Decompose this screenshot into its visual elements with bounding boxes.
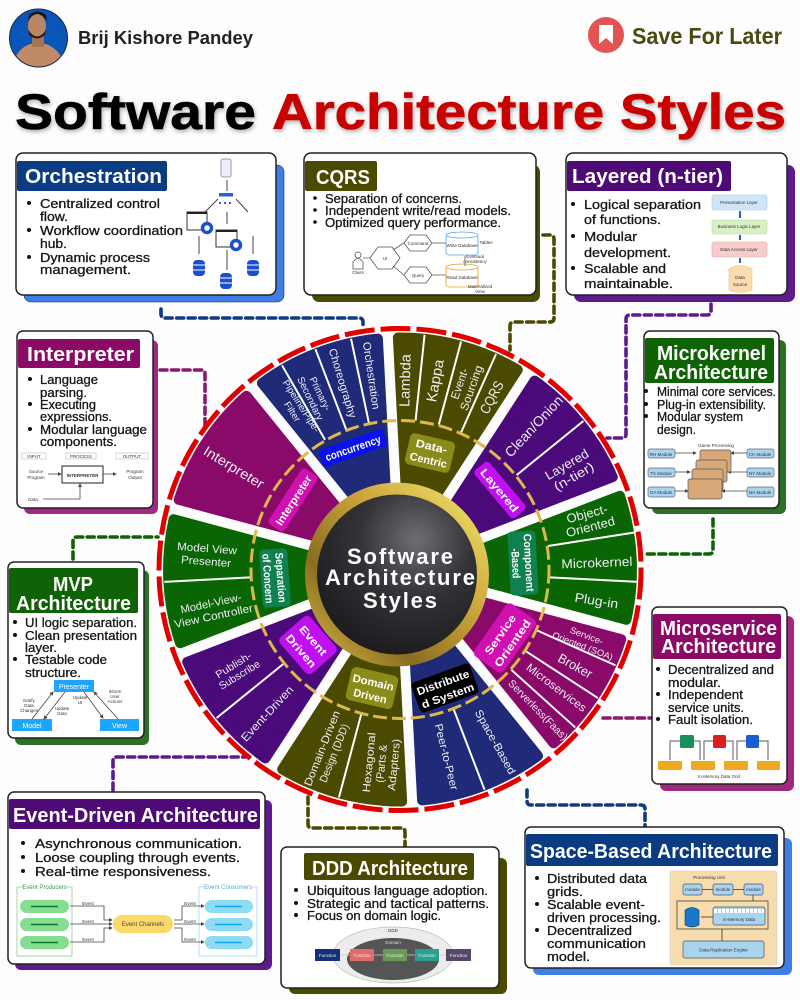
- category pill: domain driven: Driven: [352, 687, 388, 706]
- bullet list: [571, 198, 701, 291]
- heading: Layered (n-tier): [572, 166, 723, 188]
- heading: [17, 161, 167, 191]
- wheel chart: [159, 325, 641, 814]
- bullet list: Focus on domain logic.: [307, 909, 441, 923]
- bullet list: UI logic separation.: [25, 616, 137, 630]
- heading: Event-Driven Architecture: [13, 805, 258, 827]
- diagram: mvp: User: [110, 694, 120, 699]
- bullet list: Scalable event-: [547, 898, 645, 912]
- label: interpreter style: Interpreter: [201, 443, 267, 492]
- panel: interpreter: [17, 331, 158, 514]
- diagram: mvp: Data: [24, 703, 34, 708]
- bullet list: service units.: [668, 701, 744, 715]
- bullet list: parsing.: [40, 386, 87, 400]
- labels: distributed styles: Peer-to-Peer: [432, 723, 460, 792]
- segment: distributed system: [372, 625, 543, 812]
- bullet list: Modular system: [657, 410, 743, 424]
- diagram: processing unit: In-Memory Data: [723, 917, 756, 922]
- connector: event-driven: [113, 757, 250, 790]
- labels: domain styles: (Parts &: [374, 744, 390, 783]
- bullet list: Asynchronous communication.: [35, 837, 242, 851]
- diagram: processing unit: [670, 871, 777, 965]
- diagram: cqrs: View: [475, 289, 486, 294]
- diagram: interpreter flow: Output: [128, 475, 143, 480]
- labels: data-centric styles: Lambda: [397, 353, 415, 407]
- diagram: mvp: [12, 680, 139, 731]
- diagram: cqrs: Materialized: [468, 284, 493, 289]
- labels: separation styles: Presenter: [181, 554, 232, 570]
- hub title: Software: [347, 544, 453, 569]
- heading: Microservice: [660, 618, 777, 640]
- bullet list: maintainable.: [584, 277, 673, 291]
- panel: space-based: [525, 827, 792, 975]
- category pill: domain driven: [345, 666, 399, 710]
- avatar: [8, 8, 70, 70]
- labels: data-centric styles: [397, 353, 507, 417]
- segment: layered: [426, 373, 622, 565]
- save for later: Save For Later: [632, 23, 782, 49]
- diagram: cqrs: Command: [408, 241, 429, 246]
- diagram: processing unit: Data-Replication Engine: [699, 948, 748, 952]
- bullet list: Independent: [668, 688, 744, 702]
- labels: component styles: Oriented: [565, 514, 616, 540]
- labels: service styles: [505, 620, 618, 743]
- heading: Interpreter: [27, 344, 134, 366]
- save for later: [588, 17, 782, 53]
- diagram: event flow: Event: [82, 919, 94, 924]
- labels: service styles: Serverless(Faas): [505, 678, 570, 743]
- diagram: cqrs: UI: [383, 256, 387, 261]
- outer red dashed ring: [159, 328, 641, 810]
- bullet list: Real-time responsiveness.: [35, 865, 211, 879]
- category pill: separation of concern: Separation: [272, 552, 288, 603]
- heading: [526, 834, 778, 866]
- bullet list: expressions.: [40, 410, 112, 424]
- bullet list: Logical separation: [584, 198, 701, 212]
- bullet list: grids.: [547, 885, 583, 899]
- hub title: Styles: [363, 588, 437, 613]
- category pill: service oriented: Oriented: [493, 618, 534, 670]
- diagram: microservices: In-Memory Data Grid: [698, 774, 740, 779]
- heading: MVP: [53, 574, 93, 596]
- connector: layered: [607, 304, 711, 438]
- diagram: mvp: Data: [57, 711, 67, 716]
- bullet list: model.: [547, 950, 590, 964]
- diagram: mvp: Presenter: [59, 684, 90, 691]
- panel: mvp: [8, 562, 149, 745]
- labels: service styles: Service-: [569, 625, 605, 647]
- heading: DDD Architecture: [312, 858, 468, 880]
- bullet list: modular.: [668, 676, 721, 690]
- labels: concurrency styles: Filter: [281, 400, 302, 424]
- diagram: cqrs: Query: [412, 273, 425, 278]
- diagram: processing unit: module: [716, 887, 731, 892]
- labels: service styles: Broker: [555, 650, 596, 682]
- labels: domain styles: Domain-Driven: [302, 709, 343, 788]
- labels: separation styles: [171, 541, 254, 631]
- category pill: service oriented: [472, 601, 538, 675]
- category pill: layered: [473, 460, 527, 520]
- bullet list: design.: [657, 423, 696, 437]
- bullet list: [535, 872, 661, 964]
- bullet list: [21, 837, 242, 879]
- bullet list: Centralized control: [40, 197, 160, 211]
- labels: event styles: Subscribe: [217, 658, 263, 692]
- diagram: interpreter flow: Program: [27, 475, 45, 480]
- bullet list: Plug-in extensibility.: [657, 398, 766, 412]
- diagram: event flow: Event: [82, 937, 94, 942]
- labels: component styles: Microkernel: [561, 554, 633, 571]
- segment: service oriented: [436, 563, 632, 750]
- bullet list: hub.: [40, 237, 67, 251]
- hub title: [325, 544, 475, 613]
- category pill: component-based: -Based: [508, 548, 522, 579]
- diagram: event flow: [17, 884, 257, 956]
- bullet list: communication: [547, 937, 646, 951]
- heading: Orchestration: [25, 166, 162, 188]
- bullet list: driven processing.: [547, 911, 661, 925]
- labels: data-centric styles: Kappa: [424, 357, 448, 403]
- heading: [9, 568, 138, 615]
- category pill: layered: Layered: [477, 467, 520, 515]
- labels: concurrency styles: Pipeline/Pipe-: [280, 378, 321, 435]
- bullet list: Dynamic process: [40, 251, 150, 265]
- diagram: domain: Domain: [385, 940, 401, 945]
- diagram: mvp: Inform: [109, 689, 122, 694]
- diagram: cqrs: Tables: [479, 240, 493, 245]
- bullet list: components.: [40, 435, 117, 449]
- diagram: interpreter flow: PROCESS: [70, 454, 92, 459]
- diagram: cqrs: Client: [352, 270, 364, 275]
- diagram: mvp: Actions: [108, 699, 123, 704]
- title: [15, 84, 786, 140]
- heading: Microkernel: [657, 343, 766, 365]
- diagram: interpreter flow: INPUT: [27, 454, 41, 459]
- labels: data-centric styles: Event-: [449, 367, 471, 401]
- diagram: event flow: Event: [184, 901, 196, 906]
- diagram: domain: Function: [353, 953, 371, 958]
- bullet list: Separation of concerns.: [325, 192, 462, 206]
- panel: event-driven: [8, 792, 272, 970]
- bullet list: Independent write/read models.: [325, 204, 511, 218]
- diagram: microkernel modules: Game Processing: [698, 443, 734, 448]
- segment: component-based: [480, 495, 639, 627]
- bullet list: Scalable and: [584, 262, 666, 276]
- bullet list: Minimal core services.: [657, 385, 776, 399]
- labels: layered styles: (n-tier): [551, 459, 597, 494]
- labels: separation styles: Model-View-: [179, 592, 243, 616]
- diagram: event flow: Event: [184, 919, 196, 924]
- labels: component styles: Plug-in: [574, 590, 619, 611]
- diagram: event flow: Event: [82, 901, 94, 906]
- bullet list: Optimized query performance.: [325, 216, 501, 230]
- bullet list: Testable code: [25, 653, 107, 667]
- bullet list: Loose coupling through events.: [35, 851, 240, 865]
- bullet list: structure.: [25, 666, 81, 680]
- diagram: interpreter flow: Source: [29, 469, 44, 474]
- labels: domain styles: [302, 709, 403, 795]
- connector: space-based: [527, 790, 645, 827]
- labels: event styles: Event-Driven: [239, 684, 296, 744]
- connector: mvp: [73, 537, 158, 559]
- diagram: domain: [315, 927, 471, 983]
- diagram: domain: Function: [418, 953, 436, 958]
- connector: microservice: [603, 716, 652, 720]
- heading: CQRS: [316, 167, 370, 189]
- labels: separation styles: Model View: [177, 541, 237, 557]
- diagram: layers: [712, 195, 767, 292]
- category pill: service oriented: Service: [483, 613, 519, 657]
- diagram: microkernel modules: [648, 443, 774, 499]
- bullet list: [27, 197, 183, 277]
- bullet list: management.: [40, 263, 131, 277]
- diagram: layers: Data: [735, 275, 745, 280]
- diagram: cqrs: [352, 232, 493, 294]
- labels: data-centric styles: Sourcing: [459, 364, 486, 412]
- diagram: processing unit: module: [685, 887, 700, 892]
- bullet list: [656, 663, 774, 727]
- diagram: event flow: Event Consumers: [204, 885, 252, 891]
- bullet list: Workflow coordination: [40, 224, 183, 238]
- bullet list: [313, 192, 511, 230]
- labels: service styles: Oriented (SOA): [551, 630, 614, 662]
- labels: concurrency styles: [271, 341, 382, 440]
- diagram: mvp: Update: [73, 695, 88, 700]
- heading: [18, 339, 140, 368]
- diagram: interpreter flow: OUTPUT: [123, 454, 142, 459]
- labels: component styles: [561, 501, 633, 611]
- diagram: mvp: View: [112, 723, 128, 730]
- diagram: domain: Function: [386, 953, 404, 958]
- segment: data-centric: [362, 325, 521, 505]
- segment: event driven: [178, 574, 374, 766]
- category pill: event driven: Driven: [283, 633, 318, 671]
- labels: component styles: Object-: [565, 502, 609, 526]
- labels: separation styles: View Controller: [173, 602, 254, 631]
- diagram: microkernel modules: CK Module: [749, 452, 772, 457]
- labels: event styles: Publish-: [213, 650, 254, 681]
- category pill: distributed system: Distribute: [415, 668, 471, 698]
- bullet list: [644, 385, 776, 437]
- category pill: distributed system: d System: [420, 681, 476, 712]
- labels: layered styles: Clean/Onion: [501, 392, 566, 460]
- diagram: processing unit: Processing Unit: [693, 875, 726, 880]
- diagram: layers: Business Logic Layer: [718, 224, 761, 229]
- bullet list: Modular: [584, 230, 637, 244]
- diagram: mvp: UI: [78, 700, 82, 705]
- diagram: domain: Function: [450, 953, 468, 958]
- labels: domain styles: Hexagonal: [361, 732, 378, 793]
- heading: Space-Based Architecture: [530, 841, 772, 863]
- diagram: microkernel modules: RH Module: [650, 452, 673, 457]
- labels: service styles: Microservices: [524, 662, 588, 715]
- diagram: mvp: Changes: [20, 708, 39, 713]
- diagram: microkernel modules: NY Module: [749, 471, 772, 476]
- category pill: separation of concern: [259, 548, 291, 608]
- panel: microkernel: [644, 331, 786, 514]
- diagram: domain: Function: [319, 953, 337, 958]
- diagram: cqrs: Eventual: [466, 254, 484, 259]
- segment: domain driven: [279, 634, 438, 814]
- connector: orchestration: [161, 309, 363, 328]
- bullet list: Decentralized and: [668, 663, 774, 677]
- author name: Brij Kishore Pandey: [78, 28, 253, 48]
- diagram: interpreter flow: Program: [126, 469, 144, 474]
- category pill: concurrency: concurrency: [324, 434, 383, 464]
- bullet list: [28, 373, 147, 449]
- labels: domain styles: Design (DDD): [318, 722, 352, 784]
- diagram: mvp: Notify: [23, 698, 35, 703]
- category pill: component-based: [507, 530, 539, 596]
- diagram: cqrs: consistency: [463, 259, 488, 264]
- diagram: mvp: Update: [55, 706, 70, 711]
- heading: [653, 614, 781, 659]
- labels: concurrency styles: Orchestration: [360, 341, 382, 410]
- diagram: microkernel modules: GA Module: [650, 490, 673, 495]
- diagram: domain: DDD: [388, 928, 399, 933]
- diagram: microkernel modules: TX Module: [650, 471, 672, 476]
- diagram: interpreter flow: [22, 453, 148, 502]
- bullet list: Executing: [40, 398, 96, 412]
- labels: concurrency styles: Secondary: [294, 375, 325, 422]
- panel: microservice: [652, 607, 794, 791]
- diagram: microkernel modules: MA Module: [749, 490, 772, 495]
- category pill: distributed system: [410, 662, 480, 714]
- title: Architecture Styles: [272, 84, 786, 140]
- category pill: interpreter: Interpreter: [274, 473, 315, 528]
- segment: concurrency: [257, 327, 428, 514]
- labels: concurrency styles: Choreography: [326, 347, 358, 420]
- icon: bookmark: [588, 17, 624, 53]
- diagram: layers: Data Access Layer: [720, 247, 758, 252]
- author header: [8, 8, 253, 70]
- diagram: cqrs: Write Database: [447, 243, 478, 248]
- bullet list: [294, 884, 489, 923]
- category pill: data-centric: Centric: [408, 451, 448, 471]
- hub title: Architecture: [325, 565, 475, 590]
- connector: interpreter: [160, 370, 205, 425]
- bullet list: Language: [40, 373, 98, 387]
- category pill: data-centric: [404, 432, 456, 474]
- category pill: data-centric: Data-: [414, 438, 449, 457]
- bullet list: Clean presentation: [25, 629, 137, 643]
- bullet list: Distributed data: [547, 872, 647, 886]
- labels: layered styles: [501, 392, 598, 495]
- labels: data-centric styles: CQRS: [476, 378, 507, 417]
- category pill: separation of concern: of Concern: [259, 553, 275, 604]
- bullet list: Strategic and tactical patterns.: [307, 897, 489, 911]
- bullet list: Decentralized: [547, 924, 632, 938]
- labels: distributed styles: Space-Based: [472, 708, 517, 777]
- diagram: event flow: Event: [184, 937, 196, 942]
- diagram: mvp: Model: [22, 723, 42, 730]
- labels: domain styles: Adapters): [386, 738, 403, 791]
- heading: [645, 338, 774, 384]
- bullet list: Ubiquitous language adoption.: [307, 884, 488, 898]
- center hub: [305, 482, 489, 666]
- panel: ddd: [281, 847, 507, 994]
- title: Software: [15, 84, 256, 140]
- connector: cqrs: [510, 235, 554, 350]
- labels: distributed styles: [432, 708, 517, 792]
- diagram: layers: Source: [733, 282, 748, 287]
- segment: interpreter: [172, 391, 364, 576]
- heading: Architecture: [654, 362, 768, 384]
- panel: orchestration: [16, 153, 284, 302]
- bullet list: [13, 616, 137, 680]
- heading: Architecture: [661, 636, 776, 658]
- heading: Architecture: [16, 593, 131, 615]
- heading: [567, 161, 731, 191]
- bullet list: layer.: [25, 641, 57, 655]
- diagram: interpreter flow: Data: [28, 497, 38, 502]
- bullet list: flow.: [40, 210, 68, 224]
- diagram: processing unit: module: [746, 887, 761, 892]
- diagram: orchestration flow: [187, 159, 259, 289]
- labels: concurrency styles: Primary-: [307, 375, 332, 413]
- bullet list: of functions.: [584, 213, 661, 227]
- heading: [305, 161, 377, 191]
- connector: microkernel: [645, 519, 713, 554]
- diagram: event flow: Event Producers: [22, 885, 67, 891]
- category pill: interpreter: [267, 467, 319, 533]
- connector: ddd: [308, 797, 405, 846]
- diagram: event flow: Event Channels: [122, 922, 164, 928]
- bullet list: Fault isolation.: [668, 713, 753, 727]
- category pill: component-based: Component: [520, 533, 536, 592]
- panel: cqrs: [304, 153, 540, 302]
- bullet list: development.: [584, 246, 671, 260]
- inner gold dashed ring: [251, 420, 549, 718]
- diagram: layers: Presentation Layer: [720, 200, 758, 205]
- category pill: event driven: [277, 614, 339, 676]
- diagram: cqrs: Read Database: [446, 275, 478, 280]
- diagram: interpreter flow: INTERPRETER: [67, 473, 99, 478]
- labels: layered styles: Layered: [542, 446, 591, 483]
- labels: event styles: [211, 648, 296, 744]
- category pill: domain driven: Domain: [351, 673, 395, 694]
- segment: separation of concern: [161, 512, 320, 644]
- panel: layered: [566, 153, 795, 302]
- bullet list: Modular language: [40, 423, 147, 437]
- diagram: microservices: [658, 735, 780, 779]
- category pill: event driven: Event: [296, 624, 329, 659]
